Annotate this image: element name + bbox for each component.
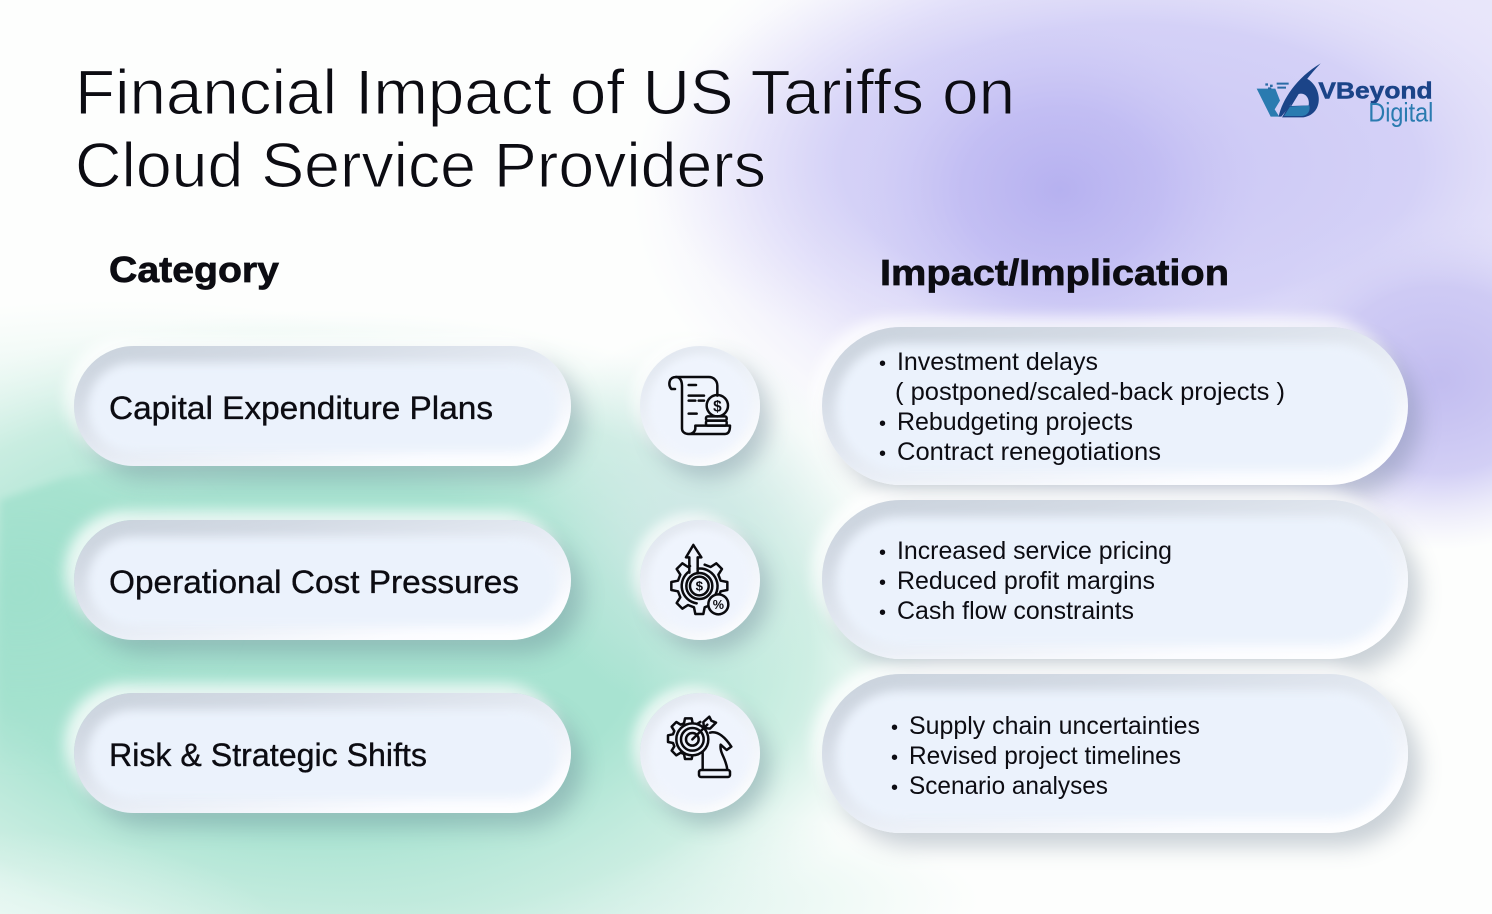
icon: gear with rising arrow xyxy=(640,520,760,640)
panel: Capital Expenditure Plans xyxy=(74,346,571,466)
heading: Category: Category xyxy=(109,249,279,290)
panel: Operational Cost Pressures xyxy=(74,520,571,640)
icon: scroll with dollar coin: $ xyxy=(713,398,722,415)
panel: Capital Expenditure Plans implications: • xyxy=(879,353,886,375)
title xyxy=(75,58,1015,201)
panel: Operational Cost Pressures implications: • xyxy=(879,602,886,624)
panel: Operational Cost Pressures: Operational Cost Pressures xyxy=(109,564,519,600)
panel: Risk & Strategic Shifts implications: Supply chain uncertainties xyxy=(909,712,1200,740)
icon: VBeyond Digital logo: VBeyond xyxy=(1318,77,1433,103)
icon: scroll with dollar coin xyxy=(640,346,760,466)
panel: Risk & Strategic Shifts implications: • xyxy=(891,717,898,739)
panel: Risk & Strategic Shifts implications: Scenario analyses xyxy=(909,772,1108,800)
icon: target, gear and chess knight xyxy=(640,693,760,813)
panel: Risk & Strategic Shifts implications xyxy=(822,674,1408,833)
panel: Operational Cost Pressures implications: • xyxy=(879,572,886,594)
panel: Capital Expenditure Plans implications: • xyxy=(879,413,886,435)
panel: Capital Expenditure Plans implications xyxy=(822,327,1408,485)
panel: Risk & Strategic Shifts implications: Revised project timelines xyxy=(909,742,1181,770)
panel: Capital Expenditure Plans implications: Investment delays xyxy=(897,348,1098,376)
title: Cloud Service Providers xyxy=(75,131,766,201)
icon: VBeyond Digital logo: Digital xyxy=(1368,98,1433,128)
panel: Operational Cost Pressures implications: Cash flow constraints xyxy=(897,597,1134,625)
panel: Risk & Strategic Shifts: Risk & Strategic Shifts xyxy=(109,737,427,773)
panel: Risk & Strategic Shifts xyxy=(74,693,571,813)
heading: Impact/Implication: Impact/Implication xyxy=(880,252,1229,293)
panel: Capital Expenditure Plans: Capital Expenditure Plans xyxy=(109,390,493,426)
panel: Operational Cost Pressures implications: Reduced profit margins xyxy=(897,567,1155,595)
panel: Operational Cost Pressures implications: Increased service pricing xyxy=(897,537,1172,565)
panel: Capital Expenditure Plans implications: • xyxy=(879,443,886,465)
panel: Operational Cost Pressures implications xyxy=(822,500,1408,659)
panel: Operational Cost Pressures implications: • xyxy=(879,542,886,564)
panel: Capital Expenditure Plans implications: Contract renegotiations xyxy=(897,438,1161,466)
icon: gear with rising arrow: % xyxy=(713,598,724,612)
panel: Risk & Strategic Shifts implications: • xyxy=(891,747,898,769)
title: Financial Impact of US Tariffs on xyxy=(75,58,1015,128)
icon: gear with rising arrow: $ xyxy=(696,579,704,594)
panel: Capital Expenditure Plans implications: ( postponed/scaled-back projects ) xyxy=(895,378,1285,406)
panel: Capital Expenditure Plans implications: Rebudgeting projects xyxy=(897,408,1133,436)
icon: VBeyond Digital logo xyxy=(1256,64,1433,128)
panel: Risk & Strategic Shifts implications: • xyxy=(891,777,898,799)
